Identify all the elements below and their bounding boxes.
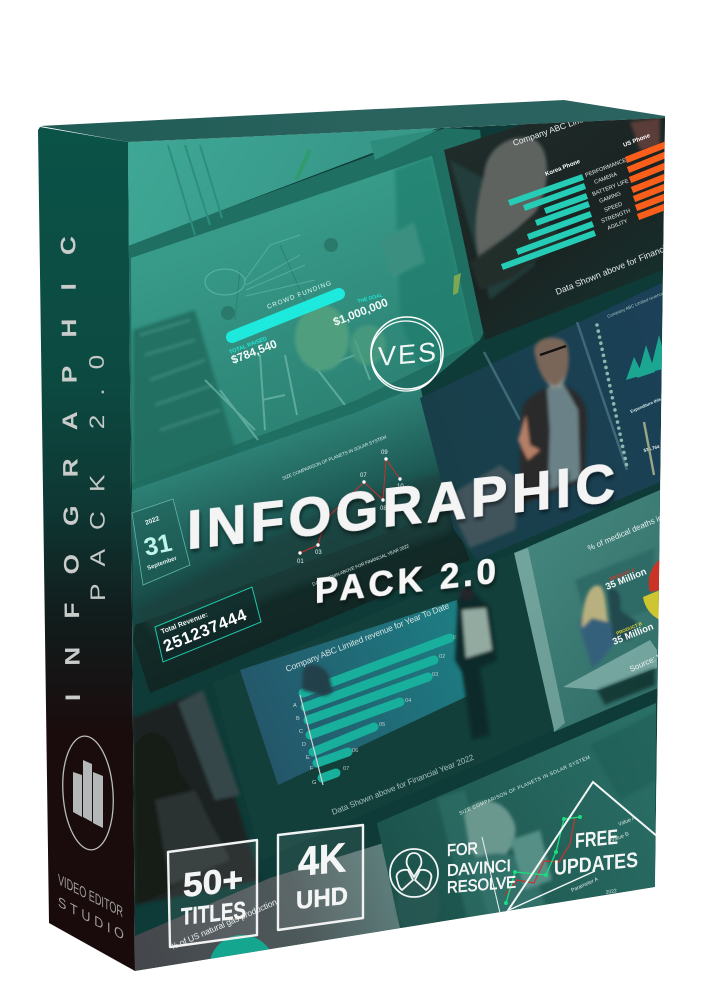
label: CROWD FUNDING	[266, 280, 332, 311]
footnote: Company ABC Limited revenue	[606, 290, 665, 319]
row letters: F	[310, 766, 314, 772]
footnote: DATA SHOWN ABOVE FOR FINANCIAL YEAR 2022	[312, 543, 410, 587]
teal half circle	[209, 935, 275, 1000]
box top face	[40, 100, 665, 142]
category labels: GAMING	[599, 191, 622, 205]
caption: % of US natural gas production	[169, 897, 278, 952]
side title: INFOGRAPHIC	[57, 236, 85, 701]
panel: man at desk	[133, 690, 260, 905]
badge: 50+ titles: 50+	[183, 860, 243, 905]
glasses	[540, 346, 566, 355]
row letters: B	[296, 716, 300, 722]
shelves	[133, 310, 240, 483]
row letters: A	[293, 703, 297, 709]
legend values	[611, 815, 637, 844]
woman figure	[455, 587, 497, 740]
category labels	[585, 158, 631, 232]
red line chart	[505, 817, 575, 895]
side brand subtitle: STUDIO	[58, 893, 124, 943]
row letters: G	[312, 780, 316, 786]
amount raised: $784,540	[230, 338, 279, 367]
date card: 31	[141, 529, 175, 562]
presenter figure	[518, 338, 587, 505]
woman figure	[579, 585, 637, 668]
side subtitle: PACK 2.0	[85, 355, 110, 601]
row values: 07	[343, 766, 349, 772]
panel: phone comparison	[444, 118, 665, 340]
panel: medical statistics	[514, 490, 660, 732]
bars: right	[626, 143, 670, 217]
row values: 04	[405, 698, 411, 704]
davinci label: FOR	[447, 839, 478, 860]
line chart: 03	[315, 550, 322, 556]
axis label: Parameter A	[570, 876, 600, 894]
subtitle: SIZE COMPARISON OF PLANETS IN SOLAR SYSTEM	[282, 434, 387, 481]
line chart: 01	[297, 559, 304, 565]
legend values: Value B	[611, 831, 630, 844]
date card: September	[147, 555, 178, 572]
box front face	[128, 111, 692, 1000]
side brand name: VIDEO EDITOR	[58, 871, 123, 922]
icon: davinci resolve	[390, 849, 438, 897]
row values: 03	[432, 672, 438, 678]
revenue card: Total Revenue:	[160, 612, 209, 636]
legend values: Value A	[618, 815, 637, 828]
free updates label: FREE	[575, 826, 618, 853]
VES logo	[371, 317, 443, 391]
free updates label	[554, 826, 638, 880]
badge: 4K UHD: UHD	[296, 882, 348, 915]
heading: Company ABC Limited revenue for Year To Date	[284, 600, 451, 674]
row letters: C	[299, 729, 303, 735]
free updates label: UPDATES	[554, 849, 638, 880]
product A: PRODUCT A	[609, 567, 636, 582]
davinci label: DAVINCI	[447, 856, 511, 880]
row letters: E	[306, 755, 310, 761]
man figure	[302, 665, 333, 696]
panel: planets comparison	[377, 703, 656, 933]
row values	[343, 635, 459, 772]
green line chart	[504, 815, 582, 905]
product A: 35 Million	[604, 566, 648, 593]
free updates triangle	[507, 782, 658, 912]
subtitle: PACK 2.0	[315, 552, 496, 611]
VES logo: VES	[378, 337, 436, 372]
davinci label	[447, 839, 516, 897]
badge: 4K UHD: 4K	[298, 834, 346, 885]
chairs	[205, 340, 370, 440]
source: Source: World	[628, 645, 678, 674]
row letters: D	[302, 742, 306, 748]
pie chart	[643, 559, 660, 620]
badge: 50+ titles	[168, 840, 257, 947]
title: INFOGRAPHIC	[187, 451, 615, 561]
progress bar	[232, 294, 339, 337]
side logo: bars in ring	[59, 734, 117, 852]
right legend: US Phone	[623, 133, 652, 149]
man figure	[464, 801, 552, 920]
box side face	[38, 127, 135, 971]
badge: 50+ titles: TITLES	[181, 897, 246, 931]
bars: left	[502, 177, 595, 267]
panel: revenue bars	[213, 553, 554, 860]
category labels: BATTERY LIFE	[592, 178, 630, 198]
green figure	[295, 305, 349, 371]
date card	[132, 499, 190, 585]
label: TOTAL RAISED	[229, 336, 268, 356]
category labels: AGILITY	[607, 218, 629, 232]
category labels: CAMERA	[594, 172, 618, 186]
product B: PRODUCT B	[616, 621, 643, 636]
category labels: SPEED	[604, 201, 623, 214]
label: THE GOAL	[357, 292, 383, 305]
goal amount: $1,000,000	[332, 297, 390, 329]
category labels: STRENGTH	[601, 208, 631, 225]
product B: 35 Million	[611, 621, 655, 648]
axis	[300, 695, 323, 785]
category labels: PERFORMANCE	[585, 158, 628, 179]
line chart: 08	[380, 506, 387, 512]
footnote: Data Shown above for Financial Year	[554, 233, 692, 297]
row values: 01	[453, 635, 459, 641]
panel: whiteboard strip	[128, 128, 440, 246]
heading: Company ABC Limited	[511, 111, 596, 148]
row values: 05	[379, 722, 385, 728]
panel: city stats	[132, 385, 470, 693]
row values: 06	[352, 748, 358, 754]
triangle chart	[626, 335, 662, 380]
panel: presenter with chart	[420, 283, 671, 560]
davinci label: RESOLVE	[447, 873, 516, 897]
product box illustration	[38, 100, 665, 971]
badge: 4K UHD	[278, 825, 363, 930]
revenue card	[155, 587, 261, 662]
subtitle: SIZE COMPARISON OF PLANETS IN SOLAR SYSTEM	[458, 755, 591, 817]
left legend: Korea Phone	[545, 159, 582, 178]
date card: 2022	[144, 515, 161, 527]
bars	[303, 638, 450, 778]
line chart: 09	[381, 450, 388, 456]
revenue card: 251237444	[161, 606, 250, 656]
row letters	[293, 703, 316, 786]
line chart	[297, 450, 404, 565]
row values: 02	[439, 654, 445, 660]
line chart: 10	[397, 484, 404, 490]
dot column	[597, 325, 627, 467]
heading: % of medical deaths in	[586, 513, 664, 553]
line chart: 07	[360, 473, 367, 479]
footnote: Data Shown above for Financial Year 2022	[330, 753, 476, 817]
secondary text: Expenditure this year	[629, 393, 671, 414]
amount: $35,764	[643, 444, 660, 453]
year: 2022	[605, 888, 618, 896]
panel: crowd funding	[131, 156, 474, 483]
panel: grey lower strip	[135, 838, 420, 971]
